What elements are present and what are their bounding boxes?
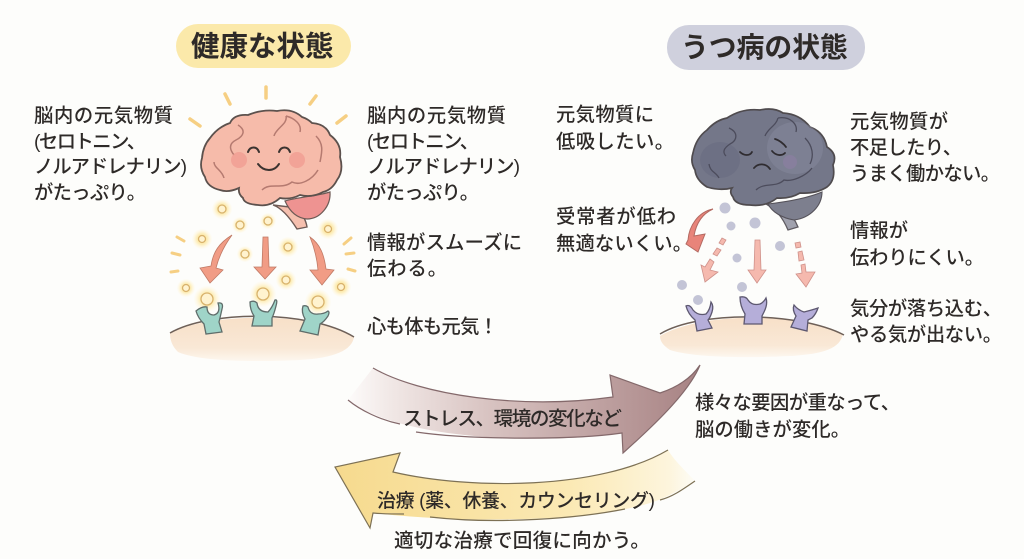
icon: healthy receptors: [196, 300, 329, 335]
text block: healthy left: [34, 105, 187, 204]
icon: healthy serotonin dots: [177, 199, 351, 315]
text block: healthy right, substances: がたっぷり。: [367, 182, 479, 204]
arrow: stress: [348, 365, 700, 453]
text block: healthy right, substances: [367, 105, 520, 204]
text block: depressed right, shortage: [850, 111, 1000, 185]
text block: depressed right, shortage: うまく働かない。: [850, 163, 1000, 185]
text block: depressed left, low intake: 元気物質に: [556, 104, 654, 126]
text block: healthy right, body and mind: 心も体も元気！: [367, 316, 498, 338]
heading: depressed state: [667, 25, 865, 70]
icon: radiating lines above healthy brain: [190, 87, 346, 126]
icon: healthy arrows: [200, 235, 334, 285]
icon: depressed red curved arrow: [686, 209, 713, 252]
text block: healthy right, substances: (セロトニン、: [367, 132, 479, 153]
text block: depressed right, information: 情報が: [850, 220, 908, 242]
text block: healthy left: 脳内の元気物質: [34, 105, 173, 127]
text block: healthy left: ノルアドレナリン): [34, 157, 187, 178]
text block: depressed right, mood: やる気が出ない。: [850, 324, 1002, 346]
label: treatment: 治療 (薬、休養、カウンセリング): [377, 490, 655, 512]
text block: healthy right, substances: ノルアドレナリン): [367, 157, 520, 178]
text block: depressed right, information: [850, 220, 984, 269]
text block: brain function change: [695, 392, 900, 441]
text block: healthy left: がたっぷり。: [34, 182, 146, 204]
text block: depressed right, shortage: 元気物質が: [850, 111, 948, 133]
illustration: depressed mound and membrane: [660, 317, 844, 357]
icon: depressed receptors: [686, 297, 818, 331]
text block: depressed right, mood: [850, 298, 1002, 346]
icon: depressed dots: [677, 202, 785, 305]
heading: healthy state: [176, 24, 351, 68]
text block: healthy left: (セロトニン、: [34, 132, 146, 153]
text block: recovery: 適切な治療で回復に向かう。: [394, 530, 650, 552]
icon: healthy brain: [201, 110, 341, 229]
text block: depressed right, shortage: 不足したり、: [850, 138, 962, 159]
text block: depressed right, information: 伝わりにくい。: [850, 247, 984, 269]
illustration: healthy mound and membrane: [170, 316, 354, 361]
text block: healthy right, information: 伝わる。: [367, 258, 447, 280]
label: stress: ストレス、環境の変化など: [403, 408, 622, 430]
text block: brain function change: 脳の働きが変化。: [695, 419, 850, 441]
icon: depressed dashed arrows: [701, 238, 815, 287]
heading: depressed state: うつ病の状態: [681, 32, 848, 63]
text block: depressed left, receptors: 無適ないくい。: [556, 233, 692, 255]
icon: depressed brain: [692, 109, 835, 230]
text block: healthy right, information: [367, 231, 522, 280]
text block: brain function change: 様々な要因が重なって、: [695, 392, 900, 414]
text block: healthy right, information: 情報がスムーズに: [367, 231, 522, 254]
text block: depressed left, receptors: [556, 206, 692, 255]
arrow: treatment: [335, 450, 695, 528]
text block: depressed right, mood: 気分が落ち込む、: [850, 298, 1002, 320]
icon: healthy side sparkles: [171, 237, 355, 272]
heading: healthy state: 健康な状態: [191, 31, 334, 63]
text block: depressed left, receptors: 受常者が低わ: [556, 206, 676, 228]
text block: depressed left, low intake: [556, 104, 674, 153]
text block: depressed left, low intake: 低吸したい。: [556, 131, 674, 153]
text block: healthy right, substances: 脳内の元気物質: [367, 105, 506, 127]
